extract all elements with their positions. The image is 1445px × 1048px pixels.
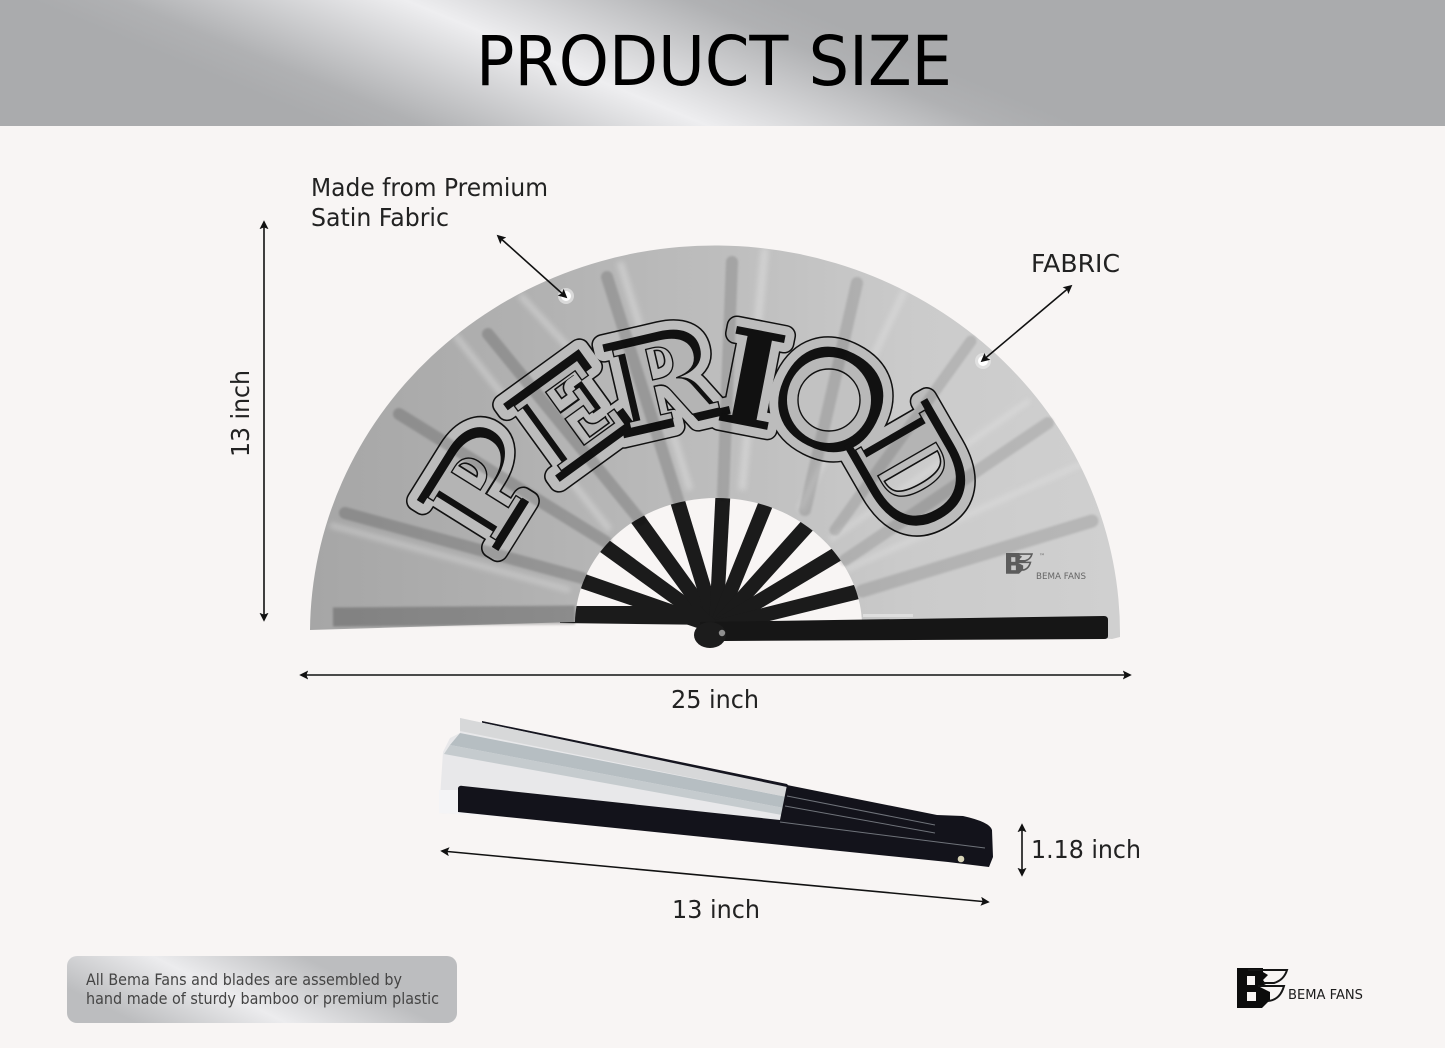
letter outlines: I [706, 298, 797, 462]
letter halo: I [706, 298, 797, 462]
letter inlines: P [406, 413, 564, 559]
letter inlines: R [602, 307, 726, 455]
letter inlines: D [830, 394, 993, 548]
open fan [310, 245, 1120, 648]
callout: fabric: FABRIC [1031, 249, 1120, 278]
eyelet: right [975, 353, 991, 369]
letter outlines: P [390, 399, 579, 573]
fan logo: ™ [1039, 553, 1045, 560]
letter outlines: O [742, 306, 917, 499]
letter outlines: D [813, 379, 1009, 563]
fan logo [1006, 553, 1086, 582]
letter inlines: E [496, 338, 645, 495]
note box: All Bema Fans and blades are assembled by [86, 970, 402, 989]
O inner band and counter line [787, 357, 871, 443]
stick highlights [780, 796, 985, 848]
letter halo: E [482, 322, 661, 511]
header banner [0, 0, 1445, 126]
dimension: folded thickness [1022, 825, 1141, 875]
guard stick [700, 616, 1108, 641]
letter bodies: D [813, 379, 1009, 563]
fan logo: BEMA FANS [1036, 572, 1086, 582]
dimension: fan width: 25 inch [671, 685, 759, 714]
logo mark [1237, 968, 1287, 1008]
letter halo: P [390, 399, 579, 573]
callout: satin fabric: Made from Premium [311, 173, 548, 202]
arrow: fabric [982, 286, 1071, 361]
folded stick edge [482, 721, 800, 810]
fan fabric [310, 245, 1120, 639]
letter bodies: P [390, 399, 579, 573]
letter bodies: E [482, 322, 661, 511]
letter bodies: I [706, 298, 797, 462]
letter halo: R [590, 293, 738, 470]
letter halo: O [742, 306, 917, 499]
folded rivet [958, 856, 964, 862]
bamboo blades [560, 475, 865, 634]
folded sticks [458, 785, 993, 867]
letter inlines [406, 307, 993, 559]
letter bodies: O [742, 306, 917, 499]
letter outlines: E [482, 322, 661, 511]
fabric folds [450, 733, 787, 808]
title: PRODUCT SIZE [476, 22, 952, 102]
letter outlines [390, 293, 1009, 573]
fabric light streaks [330, 248, 904, 592]
note box: hand made of sturdy bamboo or premium plastic [86, 989, 439, 1008]
dimension: fan height: 13 inch [226, 370, 255, 457]
brand logo [1237, 968, 1363, 1008]
hub rivet [694, 622, 726, 648]
eyelet: left [558, 288, 574, 304]
dimension: folded length [442, 851, 988, 924]
letter bodies [390, 293, 1009, 573]
fan lettering: PERIOD [390, 293, 1009, 573]
dimension: folded length: 13 inch [672, 895, 760, 924]
letter halo [390, 293, 1009, 573]
callout: satin fabric: Satin Fabric [311, 203, 449, 232]
folded fabric [439, 718, 787, 832]
logo mark [1006, 553, 1032, 574]
dimension: folded thickness: 1.18 inch [1031, 835, 1141, 864]
note box [67, 956, 457, 1023]
letter halo: D [813, 379, 1009, 563]
fabric tab [863, 614, 913, 617]
letter bodies: R [590, 293, 738, 470]
arrow: satin fabric [498, 236, 566, 297]
callout: satin fabric [311, 173, 548, 232]
brand logo: BEMA FANS [1288, 987, 1363, 1003]
ribs seen through fabric [333, 262, 1092, 617]
folded fan [439, 718, 993, 867]
letter outlines: R [590, 293, 738, 470]
